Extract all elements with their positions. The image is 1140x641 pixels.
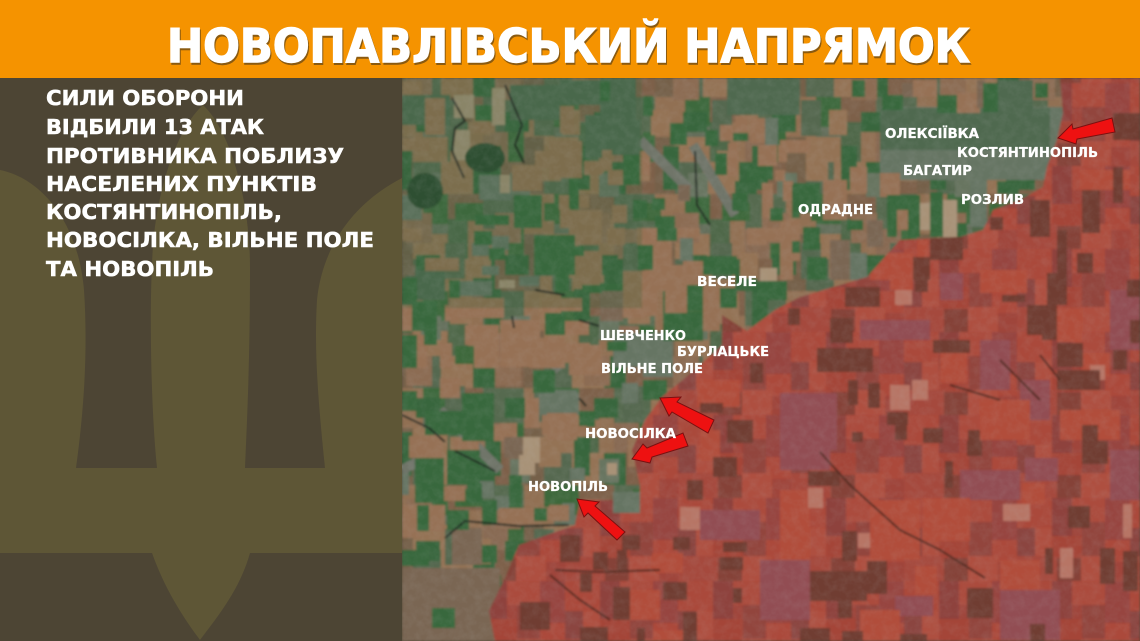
text block: attacks summary — [46, 86, 374, 281]
map: settlements and grey fields — [402, 107, 1063, 525]
map: pale fields — [454, 88, 957, 475]
map labels: КОСТЯНТИНОПІЛЬ — [957, 146, 1098, 161]
map labels: ВІЛЬНЕ ПОЛЕ — [601, 362, 703, 377]
map: rivers and ponds — [402, 85, 710, 538]
header bar — [0, 0, 1140, 78]
map: mauve zones in red area — [700, 273, 1140, 640]
title: НОВОПАВЛІВСЬКИЙ НАПРЯМОК — [167, 19, 970, 73]
text block: attacks summary: СИЛИ ОБОРОНИ — [46, 86, 244, 110]
map labels — [528, 126, 1098, 495]
map labels: ОДРАДНЕ — [798, 203, 873, 218]
panel: left text panel — [0, 78, 402, 641]
text block: attacks summary: ТА НОВОПІЛЬ — [46, 257, 214, 281]
map: dark fields in red area — [520, 113, 1140, 641]
arrow: Novosilka — [632, 433, 688, 463]
map labels: НОВОПІЛЬ — [528, 480, 608, 495]
map: green crop fields — [402, 80, 1048, 628]
arrow: Kostiantynopil — [1058, 118, 1115, 144]
map: pale pink fields — [680, 290, 1132, 578]
text block: attacks summary: ПРОТИВНИКА ПОБЛИЗУ — [46, 144, 344, 168]
map labels: НОВОСІЛКА — [585, 427, 676, 442]
icon: trident emblem — [0, 105, 402, 640]
map: tint over the north-west fields — [402, 78, 642, 308]
map: texture grain — [402, 78, 1140, 641]
map: olive-green scrub — [402, 78, 1050, 300]
text block: attacks summary: НАСЕЛЕНИХ ПУНКТІВ — [46, 172, 317, 196]
arrow: Novopil — [577, 499, 625, 540]
text block: attacks summary: КОСТЯНТИНОПІЛЬ, — [46, 200, 282, 224]
map: dark brown fields — [402, 80, 985, 641]
map labels: РОЗЛИВ — [961, 193, 1024, 208]
map labels: ВЕСЕЛЕ — [697, 275, 757, 290]
map: overall darkening tint — [402, 78, 1140, 641]
map: forests — [407, 143, 505, 209]
arrow: Vilne Pole — [660, 397, 714, 433]
map labels: БАГАТИР — [903, 164, 972, 179]
map: river corridors — [402, 140, 735, 470]
map labels: ШЕВЧЕНКО — [600, 329, 686, 344]
satellite map — [402, 78, 1140, 641]
text block: attacks summary: ВІДБИЛИ 13 АТАК — [46, 115, 265, 139]
map labels: БУРЛАЦЬКЕ — [677, 345, 769, 360]
text block: attacks summary: НОВОСІЛКА, ВІЛЬНЕ ПОЛЕ — [46, 228, 374, 252]
map labels: ОЛЕКСІЇВКА — [885, 126, 979, 142]
map: gullies in red area — [550, 355, 1060, 620]
map: red occupied zone — [488, 78, 1140, 641]
map: bright red fields — [630, 170, 1130, 641]
map: tan ploughed fields — [402, 80, 980, 538]
